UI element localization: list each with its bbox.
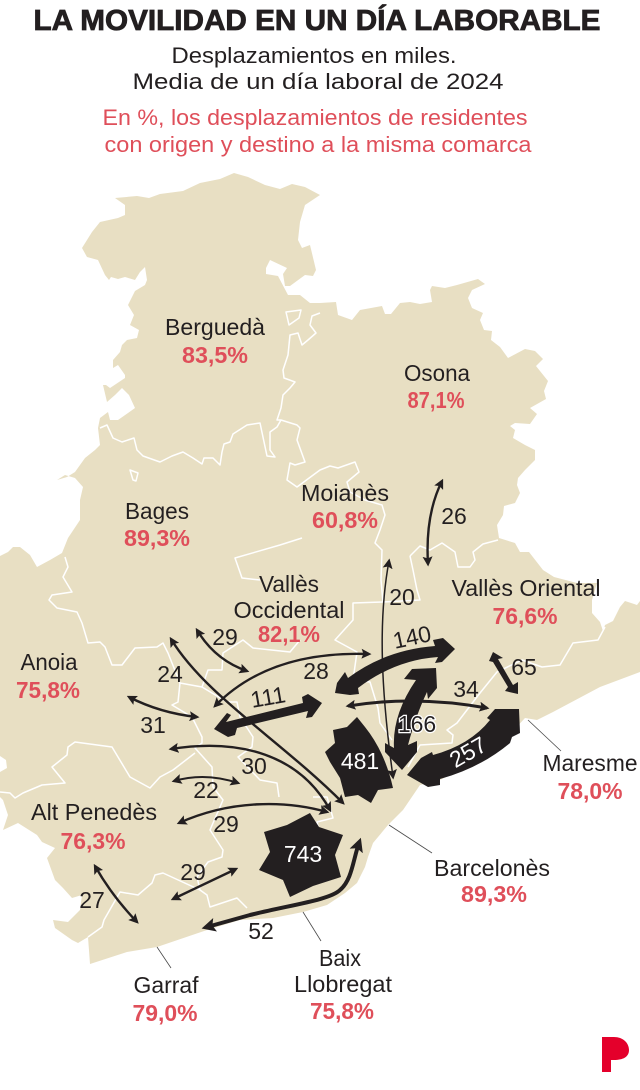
label: Alt Penedès <box>31 799 157 854</box>
title: LA MOVILIDAD EN UN DÍA LABORABLE <box>34 3 600 37</box>
label: Moianès: 60,8% <box>312 507 378 533</box>
arrow: 24 Anoia <box>171 639 343 803</box>
legend: percentage description <box>102 105 532 157</box>
label: Garraf: 79,0% <box>132 1000 198 1026</box>
flow values: 743 <box>284 841 322 867</box>
label: Baix Llobregat <box>294 945 393 1024</box>
label: Vallès Oriental: 76,6% <box>492 603 558 629</box>
label: Maresme <box>542 750 638 804</box>
label: Bages: Bages <box>125 498 189 524</box>
logo: P <box>602 1037 629 1072</box>
flow values: 26 <box>441 503 467 529</box>
flow values: 481 <box>341 748 379 774</box>
flow values: 27 <box>79 887 105 913</box>
arrow: 111 <box>214 694 322 737</box>
label: Garraf: Garraf <box>134 972 199 998</box>
label: Baix Llobregat: Llobregat <box>294 971 393 997</box>
subtitle: Media de un día laboral de 2024 <box>132 69 504 94</box>
leader lines <box>157 720 561 968</box>
label: Barcelonès <box>434 855 550 907</box>
flow values: 24 <box>157 661 183 687</box>
label: Vallès Oriental <box>452 575 600 629</box>
legend: percentage description: En %, los desplazamientos de residentes <box>102 105 528 130</box>
arrow: 29 Garraf <box>173 869 236 899</box>
flow values: 140 <box>391 620 433 654</box>
flow values: 29 <box>212 624 238 650</box>
arrow: 52 <box>207 843 359 927</box>
label: Maresme: Maresme <box>542 750 638 776</box>
flow values: 29 <box>180 859 206 885</box>
flow arrows <box>95 481 520 927</box>
map of comarcas <box>0 173 640 964</box>
arrow: 166 <box>385 668 437 770</box>
arrow: 140 <box>335 638 455 695</box>
subtitle <box>132 43 504 94</box>
label: Berguedà <box>165 314 265 368</box>
flow values: 52 <box>248 918 274 944</box>
label: Vallès Occidental: 82,1% <box>258 621 320 647</box>
arrow: 29 Vallès Occidental <box>197 630 247 671</box>
flow values: 30 <box>241 753 267 779</box>
label: Berguedà: Berguedà <box>165 314 265 340</box>
label: Bages: 89,3% <box>124 525 190 551</box>
label: Osona: 87,1% <box>408 387 464 413</box>
flow values: 65 <box>511 654 537 680</box>
zone marker: 743 <box>259 813 343 897</box>
flow values: 20 <box>389 584 415 610</box>
arrow: 30 <box>171 746 330 810</box>
label: Baix Llobregat: 75,8% <box>310 998 374 1024</box>
label: Berguedà: 83,5% <box>182 342 248 368</box>
flow values: 28 <box>303 658 329 684</box>
arrow: 27 <box>95 866 137 922</box>
flow values: 166 <box>398 711 436 737</box>
label: Barcelonès: Barcelonès <box>434 855 550 881</box>
label: Bages <box>124 498 190 551</box>
label: Vallès Oriental: Vallès Oriental <box>452 575 600 601</box>
flow values: 111 <box>249 681 287 713</box>
arrow: 34 <box>348 701 487 708</box>
label: Baix Llobregat: Baix <box>319 945 361 971</box>
flow values: 257 <box>445 731 491 773</box>
label: Anoia <box>16 649 80 703</box>
label: Alt Penedès: 76,3% <box>60 828 126 854</box>
flow values: 22 <box>193 777 219 803</box>
arrow: 28 <box>215 654 369 706</box>
label: Vallès Occidental <box>234 571 344 647</box>
arrow: 29 Alt Penedès <box>179 804 327 823</box>
label: Osona: Osona <box>404 360 470 386</box>
arrow: 22 <box>174 777 238 783</box>
label: Barcelonès: 89,3% <box>461 881 527 907</box>
label: Moianès <box>301 480 389 533</box>
zone marker: 481 <box>325 717 393 803</box>
arrow: 257 <box>407 709 520 787</box>
flow values <box>79 503 537 944</box>
flow values: 34 <box>453 676 479 702</box>
subtitle: Desplazamientos en miles. <box>172 43 456 68</box>
label: Vallès Occidental: Occidental <box>234 597 344 623</box>
arrow: 31 <box>129 697 197 717</box>
label: Maresme: 78,0% <box>558 778 622 804</box>
arrow: 26 Osona <box>428 481 442 564</box>
legend: percentage description: con origen y destino a la misma comarca <box>104 132 532 157</box>
label: Anoia: 75,8% <box>16 677 80 703</box>
label: Garraf <box>132 972 199 1026</box>
label: Moianès: Moianès <box>301 480 389 506</box>
flow values: 31 <box>140 712 166 738</box>
arrow: 65 <box>489 652 518 694</box>
label: Vallès Occidental: Vallès <box>259 571 319 597</box>
label: Osona <box>404 360 470 413</box>
label: Alt Penedès: Alt Penedès <box>31 799 157 825</box>
arrow: 20 <box>382 561 393 777</box>
flow values: 29 <box>213 811 239 837</box>
comarca labels <box>16 314 638 1026</box>
label: Anoia: Anoia <box>20 649 78 675</box>
